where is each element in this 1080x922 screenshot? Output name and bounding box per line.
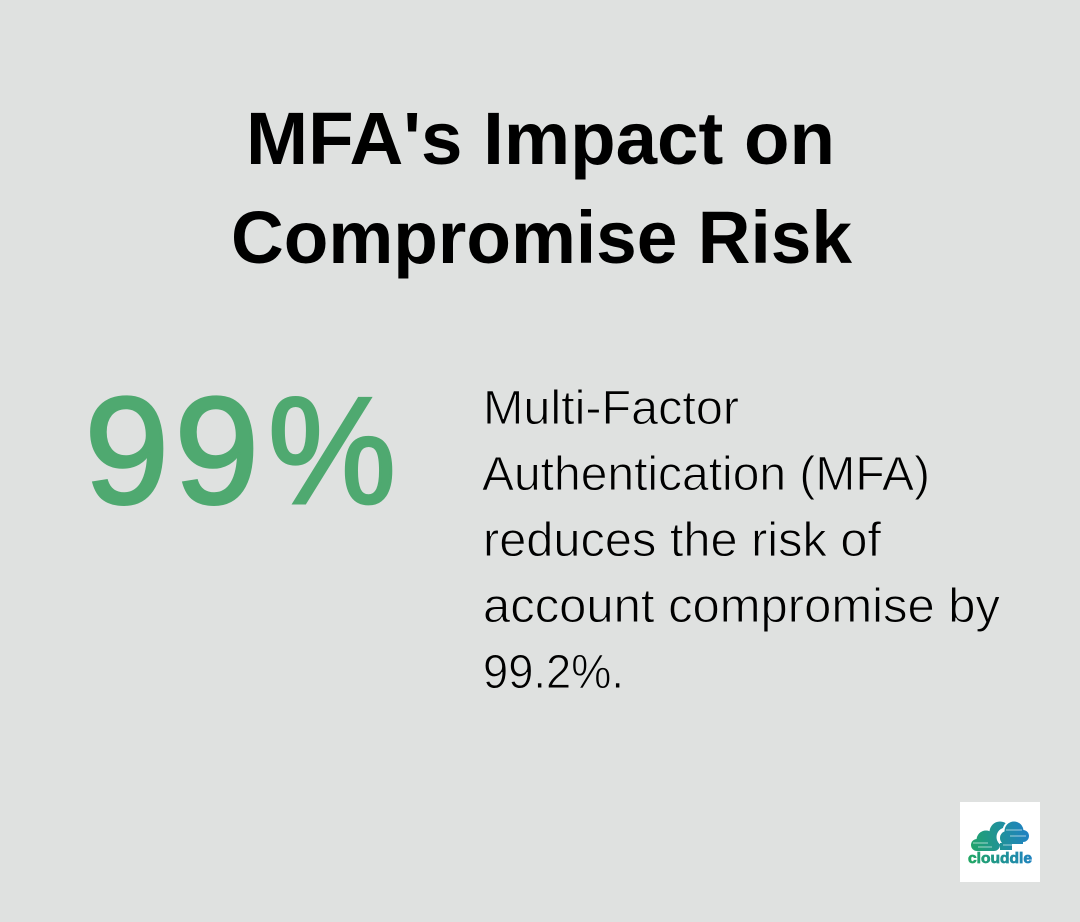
logo wordmark: clouddle: [968, 850, 1032, 867]
title: Compromise Risk: [231, 196, 853, 279]
icon: circuit lines: [973, 830, 1026, 847]
description text: 99.2%.: [483, 646, 624, 699]
icon: right cloud: [996, 820, 1029, 850]
big statistic: 9: [84, 366, 169, 536]
description text: Multi-Factor: [483, 382, 739, 435]
title: MFA's Impact on: [246, 97, 835, 180]
description text: Authentication (MFA): [482, 448, 930, 501]
icon: left cloud: [971, 830, 1000, 851]
description text: account compromise by: [483, 580, 1000, 633]
title: [231, 97, 853, 279]
icon: back crescent cloud: [990, 822, 1010, 842]
logo: clouddle: [960, 802, 1040, 882]
description text: [482, 382, 1000, 699]
big statistic: 9: [174, 366, 259, 536]
description text: reduces the risk of: [483, 514, 882, 567]
big statistic: [84, 366, 396, 536]
big statistic: %: [268, 366, 396, 536]
